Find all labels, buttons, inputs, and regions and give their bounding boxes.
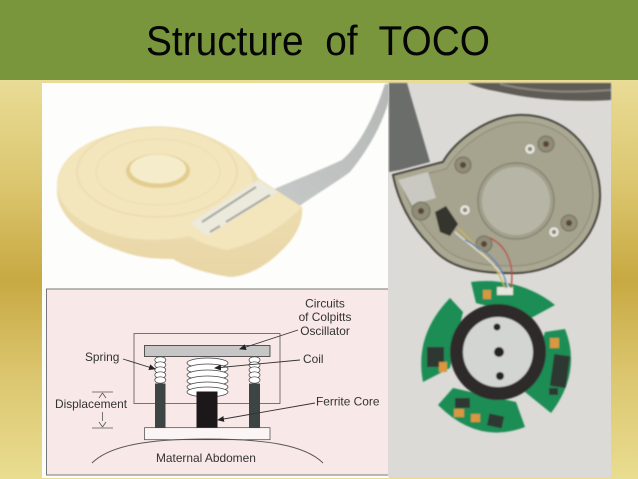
connector and wires bbox=[497, 287, 513, 295]
label sticker bbox=[190, 180, 278, 236]
transducer top face bbox=[57, 128, 253, 240]
icon: transducer cable bbox=[272, 84, 389, 207]
diagram background bbox=[46, 289, 388, 475]
icon: coiled cable top bbox=[468, 83, 611, 101]
icon: white disc bbox=[463, 317, 533, 387]
connector blob bbox=[435, 206, 458, 236]
glue patch bbox=[398, 172, 436, 205]
diagram labels: Spring bbox=[85, 350, 119, 364]
circuit plate bbox=[144, 346, 270, 356]
displacement marker bbox=[92, 392, 113, 428]
title: Structure of TOCO bbox=[146, 17, 490, 64]
icon: center disc bbox=[478, 163, 554, 239]
diagram labels: Circuits bbox=[305, 296, 345, 310]
header band bbox=[0, 0, 638, 80]
icon: screw posts bbox=[412, 136, 577, 252]
diagram labels: Ferrite Core bbox=[316, 394, 380, 408]
diagram: Colpitts oscillator structure bbox=[46, 289, 388, 475]
housing inner rim bbox=[401, 122, 593, 266]
concentric grooves bbox=[77, 127, 237, 217]
right spring bbox=[249, 357, 260, 383]
icon: dark cable upper left bbox=[389, 83, 430, 172]
icon: black ring bbox=[450, 304, 546, 400]
icon: transducer body bbox=[57, 128, 302, 277]
bottom plate bbox=[144, 428, 270, 440]
diagram labels: of Colpitts bbox=[299, 310, 351, 324]
left post bbox=[155, 384, 166, 428]
diagram labels: Displacement bbox=[55, 397, 128, 411]
printed circuit board bbox=[421, 281, 571, 433]
ferrite core bbox=[196, 392, 218, 428]
diagram labels: Coil bbox=[303, 352, 323, 366]
transducer lip top bbox=[180, 180, 302, 250]
disc holes bbox=[494, 324, 504, 380]
left spring bbox=[155, 357, 166, 383]
board components bbox=[427, 347, 570, 428]
icon: white holes bbox=[462, 146, 558, 236]
diagram labels: Oscillator bbox=[300, 324, 350, 338]
arrows bbox=[123, 330, 315, 420]
photo: opened transducer bbox=[388, 83, 611, 477]
coil bbox=[187, 358, 228, 397]
icon: center button bbox=[126, 154, 190, 188]
abdomen arc bbox=[92, 439, 323, 463]
photo: TOCO transducer exterior bbox=[42, 83, 389, 478]
outer housing frame bbox=[134, 334, 280, 404]
diagram labels: Maternal Abdomen bbox=[156, 451, 256, 465]
right post bbox=[249, 384, 260, 428]
icon: housing shell bbox=[393, 115, 600, 273]
diagram labels bbox=[55, 296, 380, 465]
